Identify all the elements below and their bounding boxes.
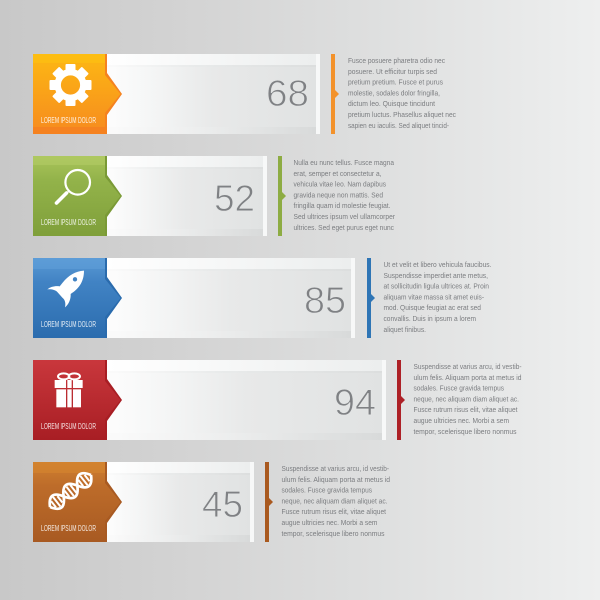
divider brown: [265, 462, 273, 542]
value bar 85: 85: [304, 280, 346, 321]
text block 4: [414, 362, 522, 436]
panel: row 2 green: [33, 156, 395, 236]
label: LOREM IPSUM DOLOR: [41, 421, 96, 431]
text block 5: tempor, scelerisque libero nonmus: [282, 529, 385, 538]
text block 4: Suspendisse at varius arcu, id vestib-: [414, 362, 522, 371]
text block 3: aliquam vitae massa sit amet euis-: [384, 292, 484, 302]
divider orange: [331, 54, 339, 134]
text block 2: Sed ultrices ipsum vel ullamcorper: [294, 212, 395, 221]
label: LOREM IPSUM DOLOR: [41, 217, 96, 227]
label: LOREM IPSUM DOLOR: [41, 319, 96, 329]
text block 1: dictum leo. Quisque tincidunt: [348, 99, 436, 108]
text block 3: aliquet finibus.: [384, 325, 426, 334]
text block 4: ulum felis. Aliquam porta at metus id: [414, 373, 522, 382]
icon: magnifying glass: [56, 170, 90, 203]
text block 3: Suspendisse imperdiet ante metus,: [384, 271, 488, 280]
value bar 52: 52: [214, 178, 255, 219]
text block 5: sodales. Fusce gravida tempus: [282, 486, 372, 494]
value bar 68: 68: [266, 73, 309, 114]
text block 1: molestie, sodales dolor fringilla,: [348, 88, 440, 98]
value bar 52: [107, 156, 267, 236]
tab red: [33, 360, 122, 440]
text block 5: augue ultricies nec. Morbi a sem: [282, 518, 378, 527]
value bar 68: [107, 54, 320, 134]
tab blue: [33, 258, 122, 338]
tab orange: [33, 54, 122, 134]
label: LOREM IPSUM DOLOR: [41, 523, 96, 533]
divider red: [397, 360, 405, 440]
tab green: [33, 156, 122, 236]
text block 2: erat, semper et consectetur a,: [294, 169, 382, 178]
text block 3: convallis. Duis in ipsum a lorem: [384, 314, 476, 323]
icon: dna helix: [45, 469, 96, 513]
text block 1: posuere. Ut efficitur turpis sed: [348, 67, 437, 76]
panel: row 5 brown: [33, 462, 390, 542]
tab brown: [33, 462, 122, 542]
value bar 45: [107, 462, 254, 542]
label: LOREM IPSUM DOLOR: [41, 115, 96, 125]
panel: row 1 orange: [33, 54, 456, 134]
text block 5: [282, 464, 390, 538]
text block 5: neque, nec aliquam diam aliquet ac.: [282, 496, 388, 506]
icon: gear: [50, 64, 92, 106]
text block 5: ulum felis. Aliquam porta at metus id: [282, 475, 390, 484]
text block 4: tempor, scelerisque libero nonmus: [414, 427, 517, 436]
text block 3: Ut et velit et libero vehicula faucibus.: [384, 260, 492, 269]
icon: rocket: [47, 271, 84, 307]
text block 1: Fusce posuere pharetra odio nec: [348, 56, 445, 65]
text block 1: sapien eu iaculis. Sed aliquet tincid-: [348, 121, 449, 130]
text block 1: [348, 56, 456, 130]
text block 2: fringilla quam id molestie feugiat.: [294, 201, 390, 210]
text block 3: [384, 260, 492, 334]
icon: gift: [55, 373, 83, 407]
text block 4: neque, nec aliquam diam aliquet ac.: [414, 394, 519, 404]
value bar 94: [107, 360, 386, 440]
panel: row 4 red: [33, 360, 522, 440]
text block 3: mod. Quisque feugiat ac erat sed: [384, 303, 481, 312]
panel: row 3 blue: [33, 258, 492, 338]
divider blue: [367, 258, 375, 338]
text block 1: pretium pretium. Fusce et purus: [348, 78, 443, 86]
text block 5: Fusce rutrum risus elit, vitae aliquet: [282, 507, 387, 516]
text block 2: Nulla eu nunc tellus. Fusce magna: [294, 158, 395, 167]
text block 3: at sollicitudin ligula ultrices at. Proin: [384, 282, 489, 290]
text block 2: vehicula vitae leo. Nam dapibus: [294, 180, 386, 188]
text block 4: sodales. Fusce gravida tempus: [414, 384, 504, 392]
text block 1: pretium luctus. Phasellus aliquet nec: [348, 110, 456, 119]
value bar 85: [107, 258, 355, 338]
value bar 45: 45: [202, 484, 243, 525]
value bar 94: 94: [334, 382, 376, 423]
text block 2: [294, 158, 395, 232]
text block 4: Fusce rutrum risus elit, vitae aliquet: [414, 405, 518, 414]
text block 2: gravida neque non mattis. Sed: [294, 190, 383, 200]
text block 5: Suspendisse at varius arcu, id vestib-: [282, 464, 389, 473]
text block 4: augue ultricies nec. Morbi a sem: [414, 416, 509, 425]
text block 2: ultrices. Sed eget purus eget nunc: [294, 223, 394, 232]
divider green: [278, 156, 286, 236]
